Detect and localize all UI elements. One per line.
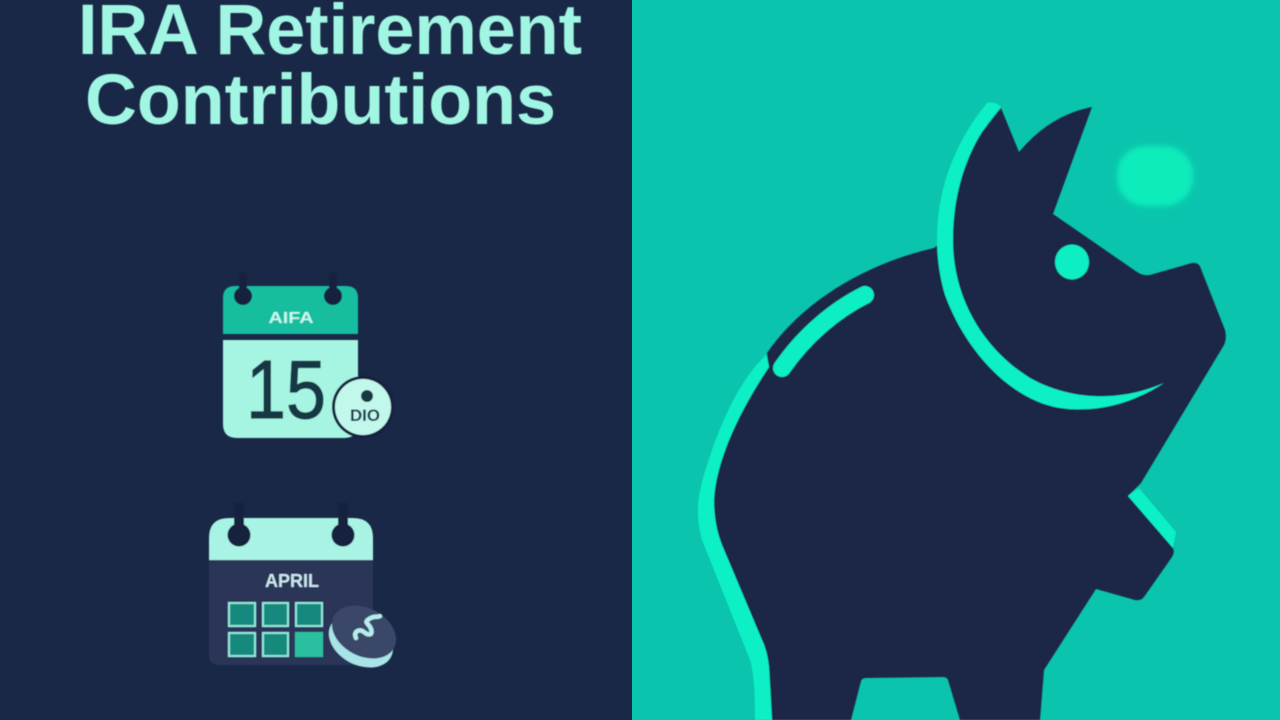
coin above the pig: [1117, 146, 1193, 206]
icon: calendar showing the 15th: [223, 272, 394, 438]
calendar month label: AIFA: [268, 310, 314, 327]
calendar top band: [209, 518, 373, 560]
calendar badge: [332, 376, 394, 438]
panel: teal right background: [632, 0, 1280, 720]
title: [78, 0, 582, 140]
head crescent highlight: [937, 102, 1164, 409]
pig eye: [1055, 244, 1089, 280]
calendar day grid: [229, 603, 322, 656]
illustration: piggy bank: [698, 102, 1226, 720]
title: Contributions: [85, 61, 556, 140]
panel: navy left background: [0, 0, 632, 720]
shoulder highlight: [782, 295, 865, 368]
calendar month label: APRIL: [265, 571, 319, 591]
calendar date number: 15: [246, 343, 326, 436]
calendar page: [223, 340, 358, 438]
calendar rings: [234, 272, 342, 305]
calendar badge: DIO: [350, 406, 380, 425]
pig body silhouette: [714, 107, 1226, 720]
front leg highlight: [1128, 488, 1176, 548]
calendar header: [223, 286, 358, 334]
coin: [320, 595, 405, 678]
back highlight: [698, 355, 772, 720]
calendar rings: [228, 503, 354, 546]
calendar body: [209, 560, 373, 665]
icon: April calendar with coin: [209, 503, 405, 678]
